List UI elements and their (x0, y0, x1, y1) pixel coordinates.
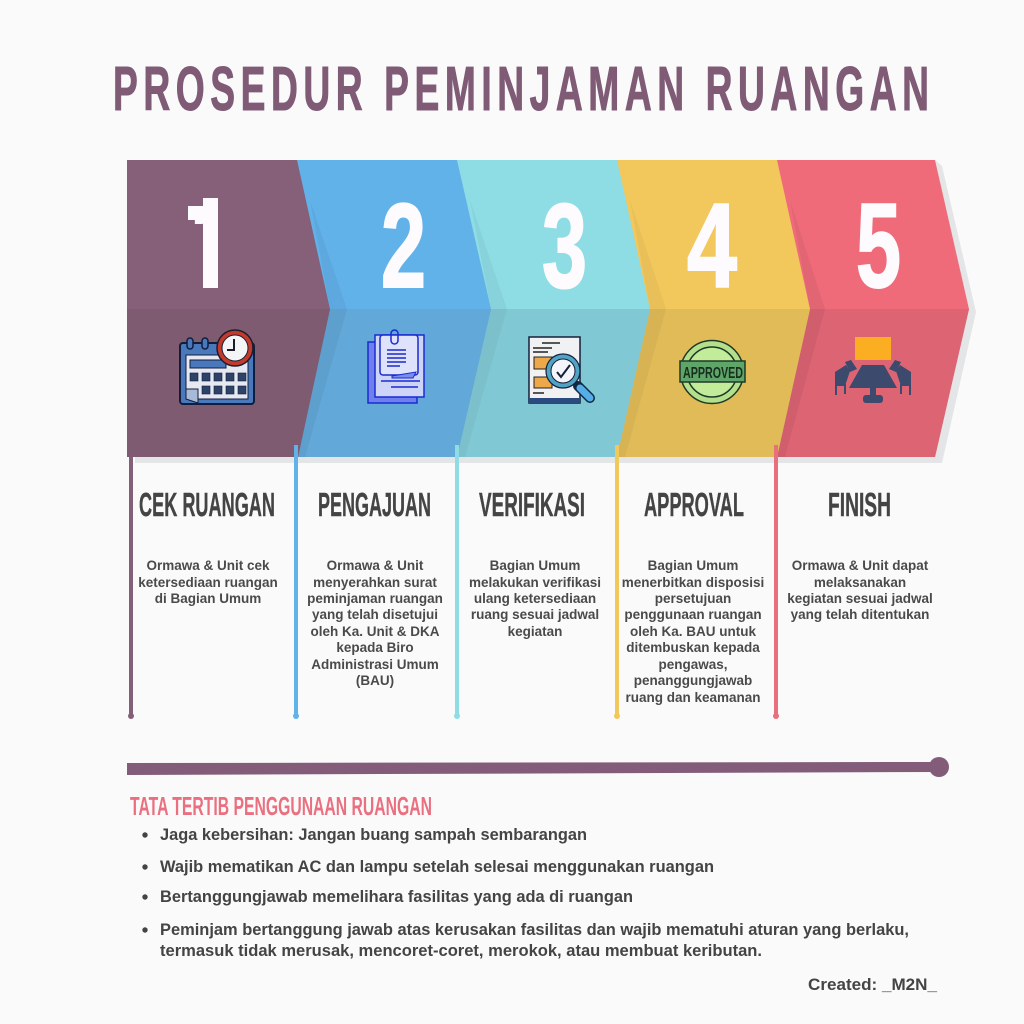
list: rules: Jaga kebersihan: Jangan buang sampah sembarangan (160, 826, 587, 844)
text: step 2 description: yang telah disetujui (312, 607, 438, 622)
icon: verification magnifier (529, 337, 590, 403)
text: step 3 description (469, 558, 601, 639)
heading: approval: APPROVAL (644, 486, 744, 523)
timeline post 2 (293, 445, 299, 719)
timeline post 5 (773, 445, 779, 719)
text: step 2 description: oleh Ka. Unit & DKA (310, 624, 440, 639)
heading: rules: TATA TERTIB PENGGUNAAN RUANGAN (130, 791, 432, 821)
text: step 5 description: kegiatan sesuai jadwal (787, 591, 933, 606)
list: rules (142, 826, 909, 960)
text: step 3 description: melakukan verifikasi (469, 575, 601, 590)
text: step 4 description (622, 558, 764, 705)
text: step 2 description: peminjaman ruangan (307, 591, 443, 606)
icon: calendar with clock (180, 330, 254, 404)
panel: step 5 chevron (760, 160, 969, 457)
number 1 (188, 198, 218, 288)
number 4: 4 (687, 179, 737, 313)
number 1: 1 (191, 179, 227, 313)
text: step 4 description: ditembuskan kepada (626, 640, 760, 655)
text: step 3 description: kegiatan (508, 624, 562, 639)
text: step 4 description: ruang dan keamanan (625, 690, 761, 705)
text: step 3 description: Bagian Umum (490, 558, 580, 573)
list: rules: Peminjam bertanggung jawab atas kerusakan fasilitas dan wajib mematuhi aturan yang berlaku, (160, 921, 909, 939)
heading: cek ruangan: CEK RUANGAN (139, 486, 275, 523)
text: step 5 description (787, 558, 933, 622)
number 5: 5 (856, 179, 901, 313)
list: rules: Bertanggungjawab memelihara fasilitas yang ada di ruangan (160, 888, 633, 906)
panel: step 1 chevron (127, 160, 330, 457)
text: step 4 description: penanggungjawab (634, 673, 752, 688)
heading: finish: FINISH (828, 486, 891, 523)
icon: documents (368, 330, 424, 403)
text: step 4 description: menerbitkan disposisi (622, 575, 764, 590)
text: step 2 description: (BAU) (356, 673, 394, 688)
panel: step 4 chevron (600, 160, 810, 457)
heading: pengajuan: PENGAJUAN (318, 486, 431, 523)
text: step 1 description: di Bagian Umum (155, 591, 261, 606)
text: step 4 description: pengawas, (658, 657, 728, 672)
text: step 3 description: ruang sesuai jadwal (471, 607, 599, 622)
text: step 4 description: oleh Ka. BAU untuk (630, 624, 756, 639)
heading: verifikasi: VERIFIKASI (479, 486, 585, 523)
text: step 2 description: kepada Biro (336, 640, 414, 655)
timeline post 4 (614, 445, 620, 719)
text: step 4 description: Bagian Umum (648, 558, 738, 573)
number 3: 3 (542, 179, 587, 313)
text: step 4 description: persetujuan (655, 591, 731, 606)
timeline post 1 (128, 457, 134, 719)
list: rules: termasuk tidak merusak, mencoret-coret, merokok, atau membuat keributan. (160, 942, 762, 960)
chevron banner (127, 160, 976, 463)
divider bar with end dot (127, 757, 949, 777)
text: step 4 description: penggunaan ruangan (624, 607, 762, 622)
text: step 5 description: melaksanakan (814, 575, 906, 590)
text: step 5 description: yang telah ditentukan (791, 607, 929, 622)
number 2: 2 (381, 179, 426, 313)
text: step 2 description: Administrasi Umum (311, 657, 439, 672)
title: PROSEDUR PEMINJAMAN RUANGAN (113, 54, 929, 123)
timeline post 3 (454, 445, 460, 719)
text: step 2 description: Ormawa & Unit (327, 558, 424, 573)
icon: meeting table (835, 337, 911, 403)
text: step 1 description (138, 558, 278, 606)
list: rules: Wajib mematikan AC dan lampu setelah selesai menggunakan ruangan (160, 858, 714, 876)
credit: Created: _M2N_ (808, 976, 938, 994)
icon: approved stamp: APPROVED (683, 365, 743, 382)
icon: approved stamp (680, 340, 745, 404)
text: step 3 description: ulang ketersediaan (474, 591, 596, 606)
text: step 2 description (307, 558, 443, 688)
text: step 5 description: Ormawa & Unit dapat (792, 558, 929, 573)
text: step 2 description: menyerahkan surat (313, 575, 437, 590)
panel: step 3 chevron (440, 160, 650, 457)
panel: step 2 chevron (280, 160, 491, 457)
text: step 1 description: Ormawa & Unit cek (146, 558, 270, 573)
text: step 1 description: ketersediaan ruangan (138, 575, 278, 590)
